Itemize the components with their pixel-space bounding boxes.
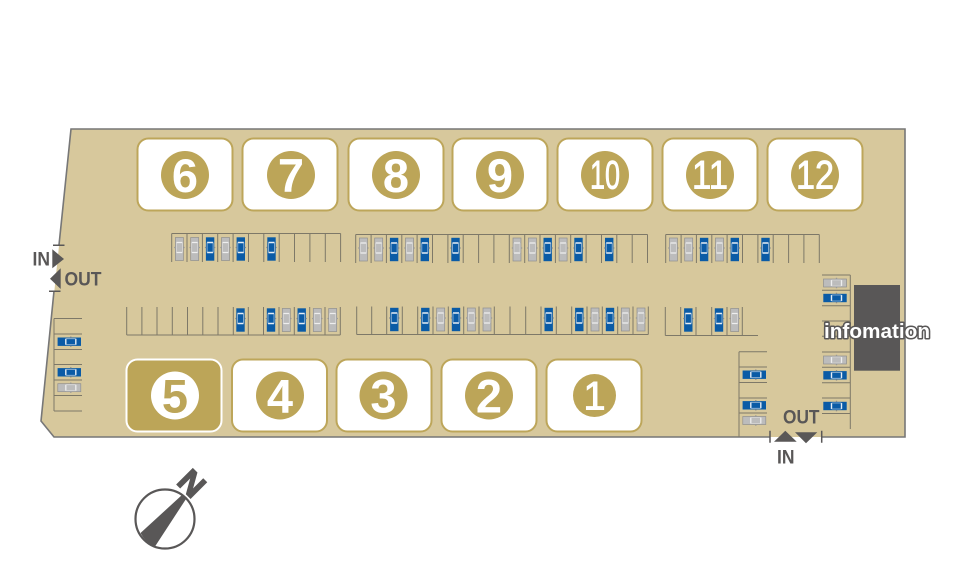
parking card 9: 9 — [487, 149, 513, 202]
parking card 8: 8 — [383, 149, 409, 202]
parking card 6: 6 — [172, 149, 198, 202]
information building — [854, 285, 900, 371]
parking card 6 — [138, 138, 232, 210]
parking card 5 highlighted: 5 — [162, 370, 188, 422]
west entrance and exit markers: OUT — [64, 270, 102, 290]
parking card 1 — [546, 360, 642, 432]
lower parking row, centre block — [357, 306, 648, 334]
parking card 2: 2 — [476, 370, 502, 422]
parking card 11: 11 — [692, 154, 728, 198]
lower parking row, west block — [127, 307, 340, 335]
parking card 3 — [336, 360, 432, 432]
parking card 7: 7 — [278, 149, 304, 202]
south-east parking, west side — [739, 352, 767, 437]
parking card 1: 1 — [583, 374, 606, 418]
information label: infomation — [824, 321, 930, 343]
parking card 10 — [558, 138, 652, 210]
parking card 3: 3 — [370, 370, 397, 422]
south entrance and exit markers: OUT — [783, 408, 820, 428]
parking card 11 — [662, 138, 758, 210]
lower parking row, east block — [665, 307, 758, 336]
parking card 2 — [442, 360, 536, 432]
parking card 12: 12 — [796, 154, 834, 198]
upper parking row, centre block — [356, 234, 648, 263]
parking card 7 — [242, 138, 338, 210]
parking card 8 — [348, 138, 444, 210]
parking card 10: 10 — [590, 154, 620, 198]
parking card 4 — [232, 360, 327, 432]
south entrance and exit markers: IN — [777, 448, 794, 468]
parking card 5 highlighted — [126, 360, 222, 432]
compass — [136, 462, 213, 548]
parking card 12 — [768, 138, 862, 210]
south-east parking, east side — [822, 275, 850, 429]
west entrance and exit markers — [32, 245, 102, 291]
south entrance and exit markers — [770, 408, 822, 468]
parking card 9 — [452, 138, 548, 210]
parking lot ground — [41, 129, 905, 437]
upper parking row, west block — [172, 234, 341, 262]
upper parking row, east block — [666, 234, 819, 263]
compass: N — [171, 462, 213, 504]
left side parking — [54, 318, 82, 411]
parking card 4: 4 — [267, 370, 293, 422]
west entrance and exit markers: IN — [32, 250, 50, 270]
